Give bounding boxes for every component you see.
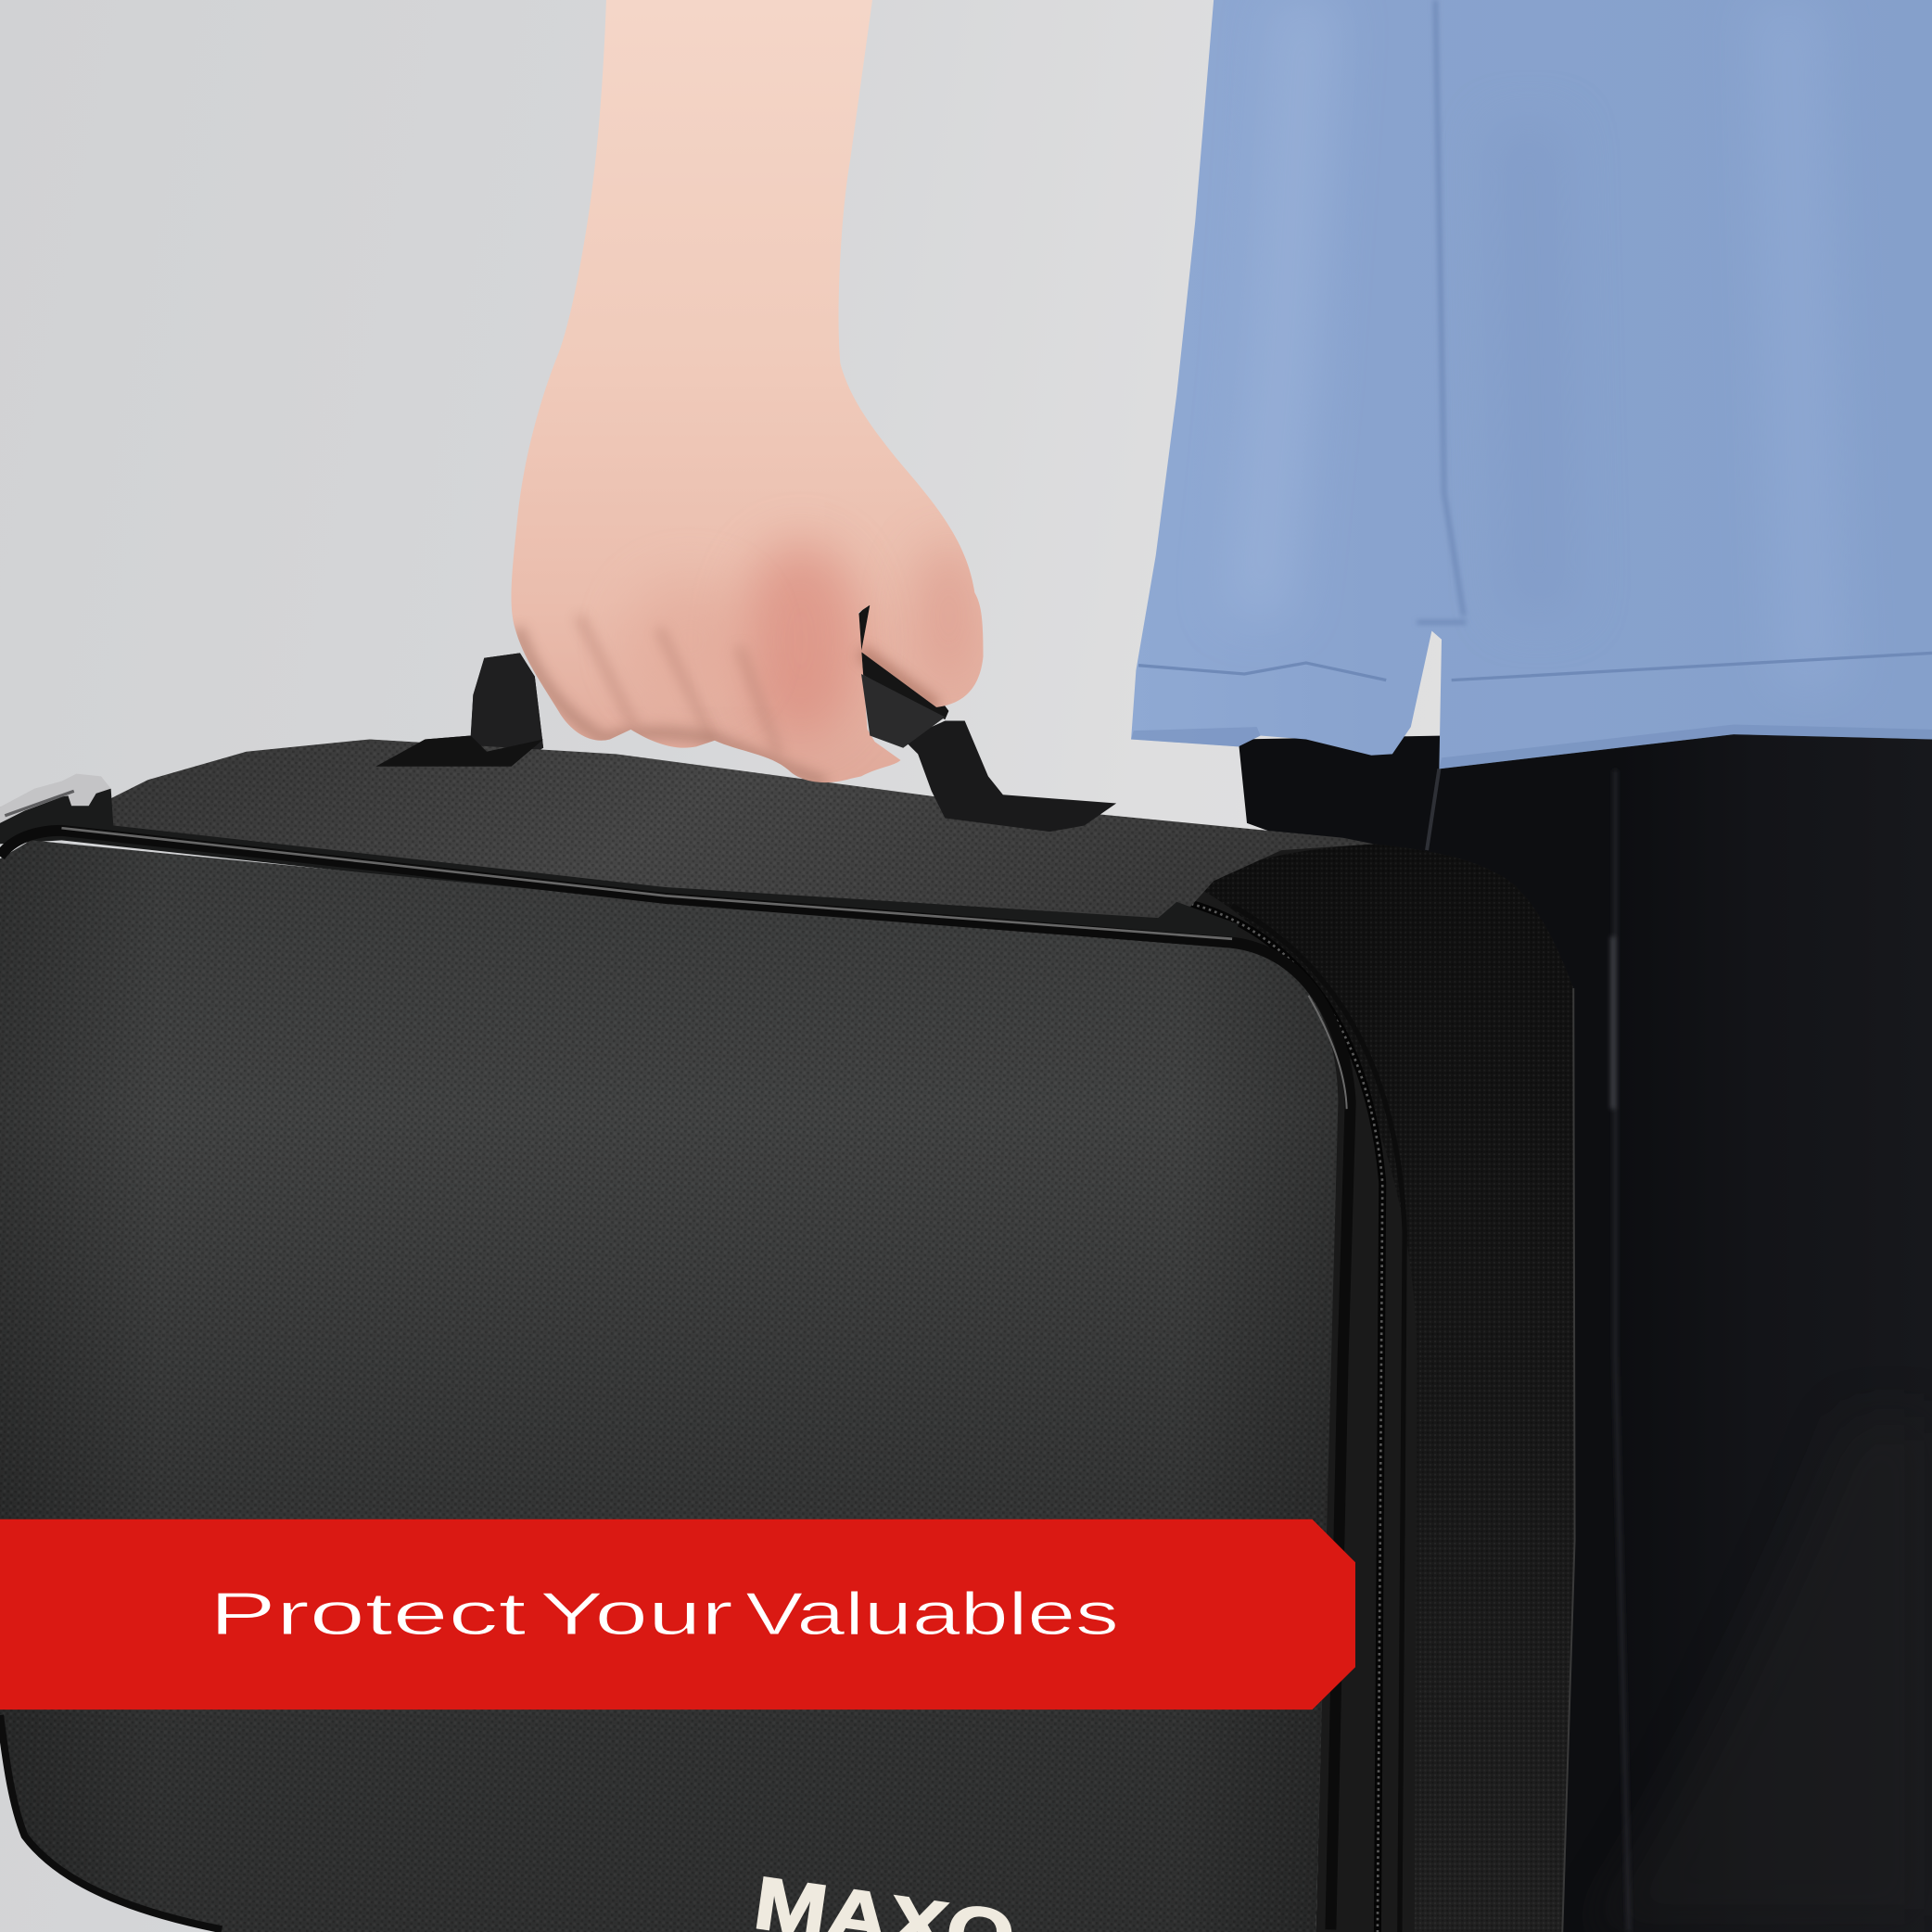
banner title: Valuables <box>745 1580 1119 1647</box>
case side panel <box>1179 844 1575 1932</box>
shirt fold highlights <box>1257 0 1811 690</box>
velcro fabric <box>1201 844 1575 1932</box>
zipper shoulder <box>0 789 1239 951</box>
banner title: Protect <box>210 1580 527 1647</box>
banner title <box>210 1580 1119 1647</box>
trousers <box>1239 727 1932 1932</box>
zipper pull <box>0 774 111 823</box>
zipper track <box>1179 901 1405 1932</box>
handle right strap <box>903 721 1116 832</box>
red banner <box>0 1519 1355 1710</box>
handle left strap patch <box>375 735 543 767</box>
shirt side seam <box>1417 0 1467 622</box>
arm and hand <box>512 0 983 782</box>
case front face <box>0 840 1338 1932</box>
handle left strap <box>375 653 543 767</box>
handle grip <box>861 674 945 748</box>
handle grip shadow <box>857 604 948 719</box>
case top panel <box>111 739 1374 939</box>
banner title: Your <box>540 1580 733 1647</box>
shirt hem stitching <box>1138 653 1932 680</box>
hand shading <box>517 542 985 783</box>
case piping edge <box>0 828 1351 1929</box>
blue polo shirt <box>1131 0 1932 769</box>
